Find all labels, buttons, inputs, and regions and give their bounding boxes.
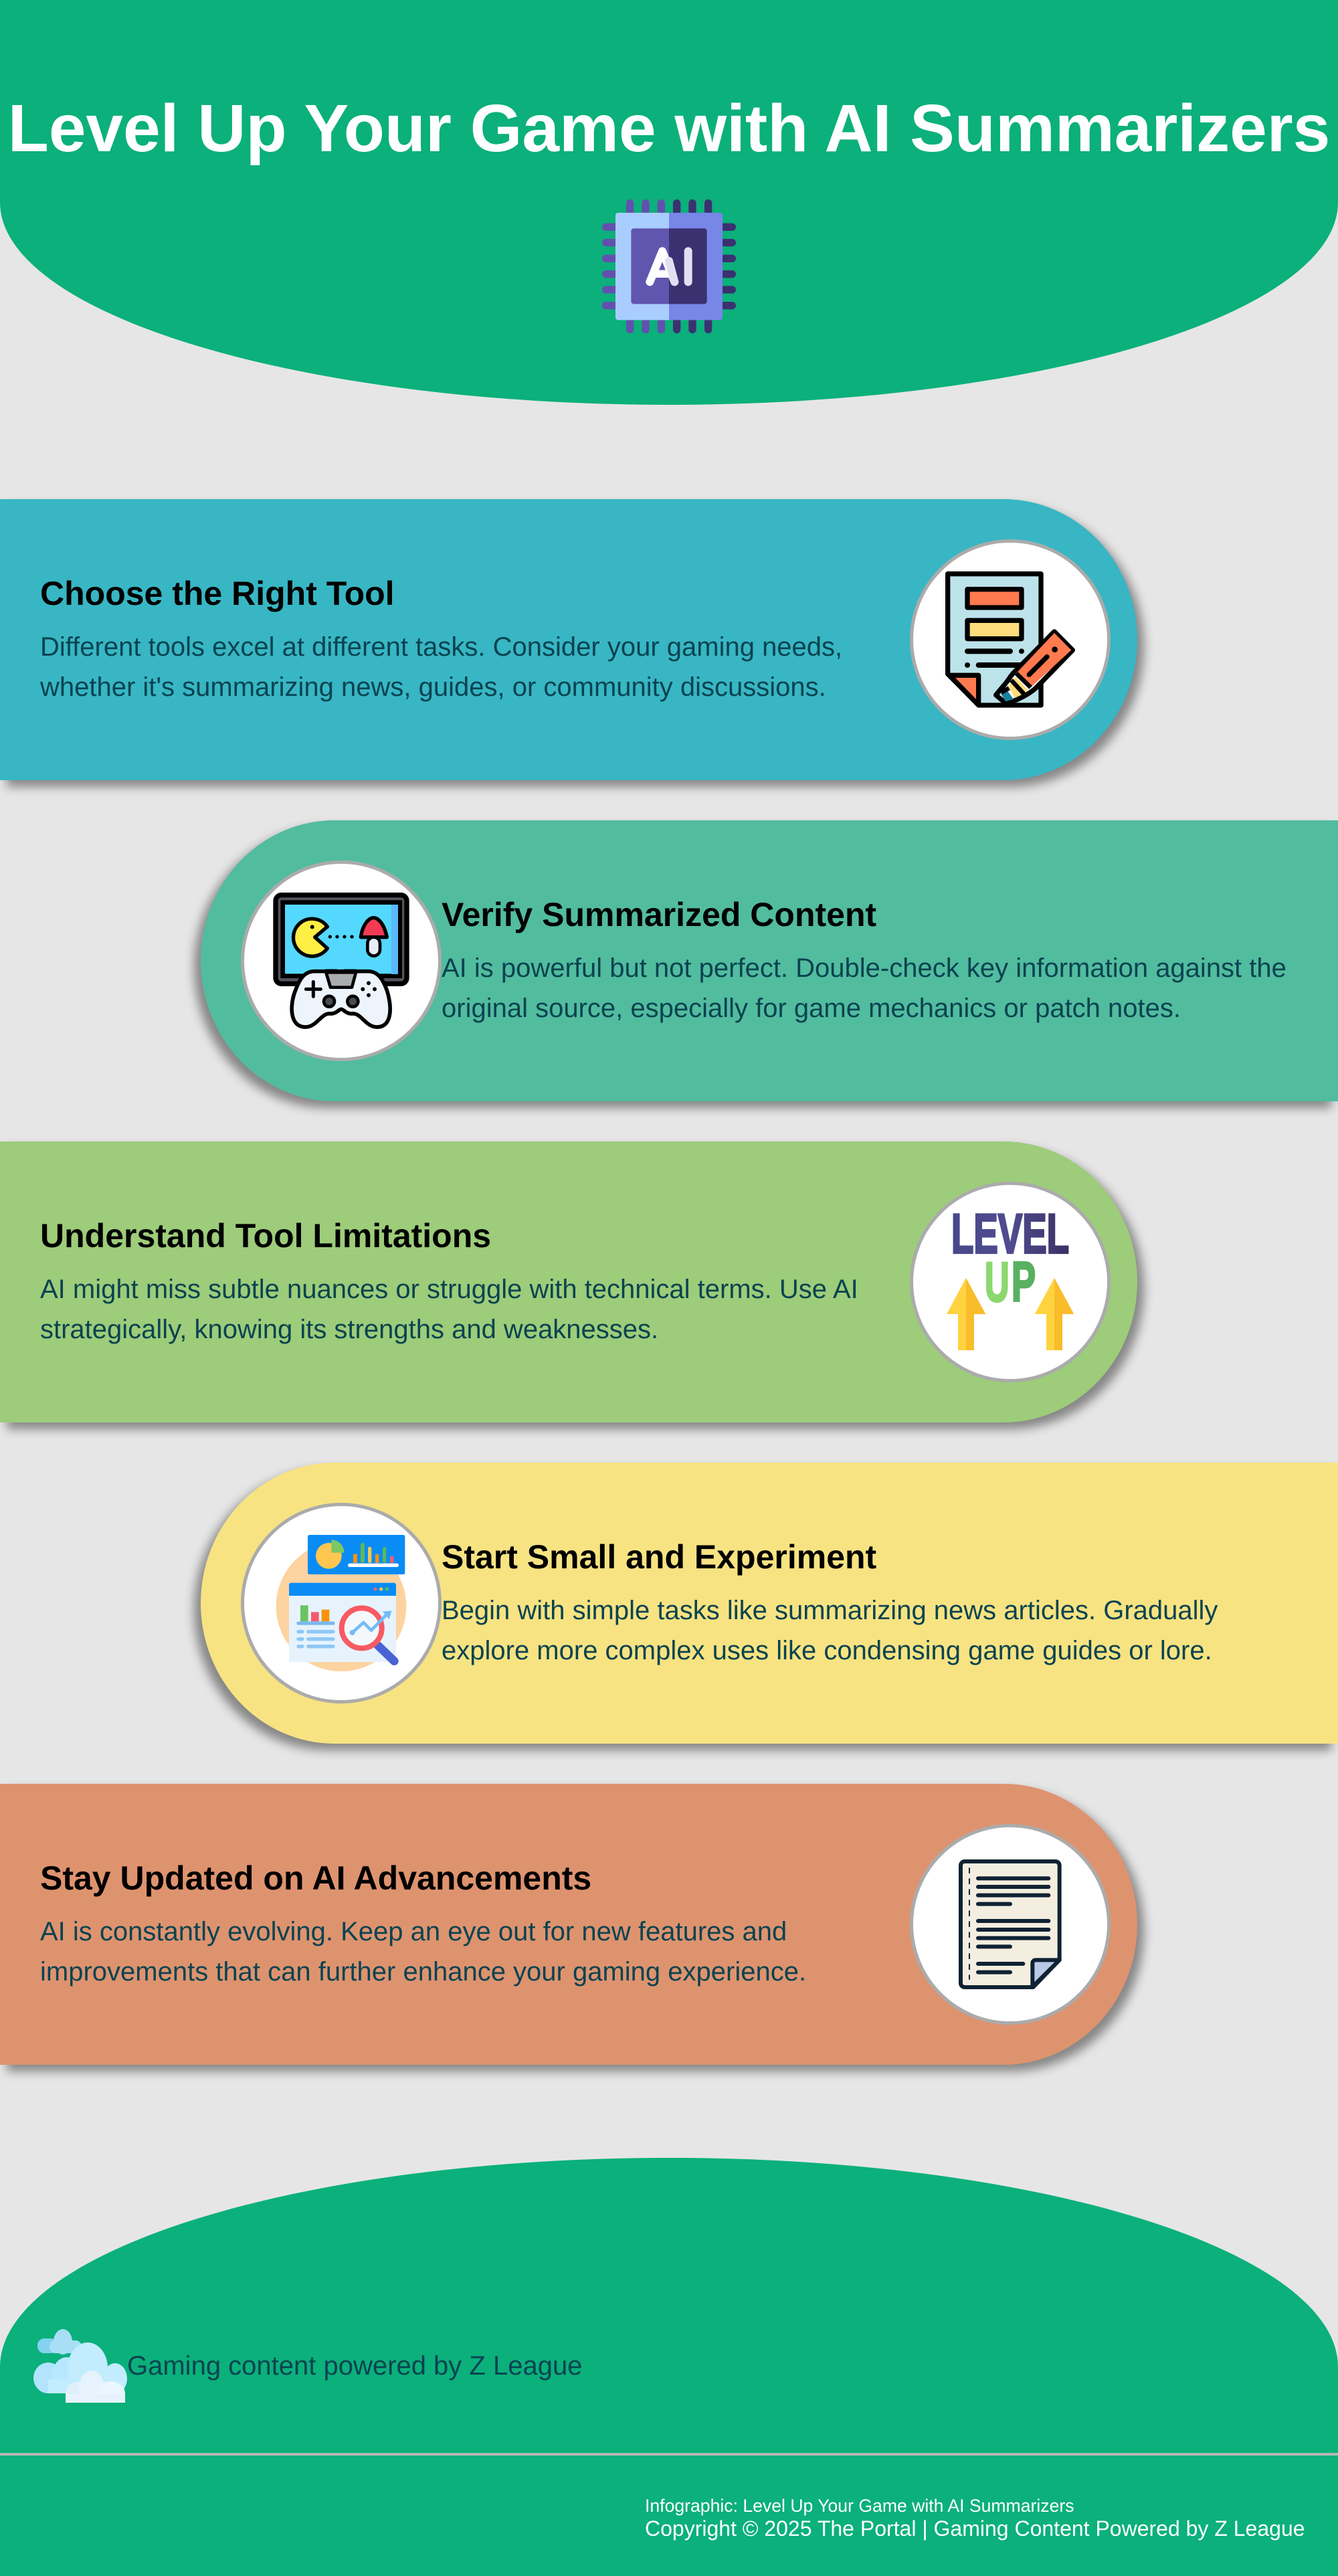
- panel: verify summarized content: [201, 820, 1338, 1101]
- text block: stay updated on AI advancements: improvements that can further enhance your gaming experience.: [40, 1957, 806, 1987]
- text block: stay updated on AI advancements: [40, 1859, 806, 1987]
- text block: understand tool limitations: strategically, knowing its strengths and weaknesses.: [40, 1315, 658, 1344]
- panel: understand tool limitations: [0, 1141, 1137, 1422]
- text block: understand tool limitations: AI might miss subtle nuances or struggle with technical terms. Use AI: [40, 1275, 858, 1304]
- title: Level Up Your Game with AI Summarizers: [8, 91, 1330, 166]
- icon circle: lined document: [910, 1824, 1111, 2025]
- icon circle: analytics dashboard: [241, 1503, 442, 1704]
- text block: understand tool limitations: Understand Tool Limitations: [40, 1217, 491, 1255]
- text block: start small and experiment: explore more complex uses like condensing game guides or lore.: [442, 1636, 1212, 1665]
- icon: clouds: [33, 2329, 127, 2403]
- icon circle: level up: U: [985, 1251, 1010, 1313]
- text block: choose the right tool: whether it's summarizing news, guides, or community discussions.: [40, 672, 826, 702]
- icon: AI chip: [602, 199, 736, 333]
- text block: stay updated on AI advancements: AI is constantly evolving. Keep an eye out for new features and: [40, 1917, 787, 1946]
- icon circle: level up: [910, 1182, 1111, 1382]
- icon circle: document and pencil: [910, 539, 1111, 740]
- panel: choose the right tool: [0, 499, 1137, 780]
- text block: verify summarized content: [442, 896, 1286, 1023]
- icon circle: level up: P: [1012, 1251, 1036, 1313]
- text block: verify summarized content: AI is powerful but not perfect. Double-check key information against the: [442, 953, 1286, 983]
- icon circle: monitor and game controller: [241, 860, 442, 1061]
- panel: stay updated on AI advancements: [0, 1784, 1137, 2065]
- text block: start small and experiment: Begin with simple tasks like summarizing news articles. Gradually: [442, 1596, 1218, 1625]
- text block: stay updated on AI advancements: Stay Updated on AI Advancements: [40, 1859, 591, 1897]
- text block: choose the right tool: Different tools excel at different tasks. Consider your gaming needs,: [40, 632, 842, 662]
- panel: start small and experiment: [201, 1463, 1338, 1744]
- header banner: [0, 0, 1338, 405]
- copyright text: Infographic: Level Up Your Game with AI Summarizers: [645, 2496, 1074, 2516]
- text block: verify summarized content: original source, especially for game mechanics or patch notes.: [442, 994, 1181, 1023]
- text block: verify summarized content: Verify Summarized Content: [442, 896, 876, 933]
- copyright text: Copyright © 2025 The Portal | Gaming Content Powered by Z League: [645, 2516, 1305, 2541]
- copyright text: [645, 2496, 1305, 2541]
- text block: start small and experiment: Start Small and Experiment: [442, 1538, 876, 1576]
- text block: choose the right tool: [40, 575, 842, 702]
- text block: understand tool limitations: [40, 1217, 858, 1344]
- footer panel: [0, 2158, 1338, 2576]
- text block: choose the right tool: Choose the Right Tool: [40, 575, 395, 612]
- footer attribution text: Gaming content powered by Z League: [127, 2351, 582, 2381]
- text block: start small and experiment: [442, 1538, 1218, 1665]
